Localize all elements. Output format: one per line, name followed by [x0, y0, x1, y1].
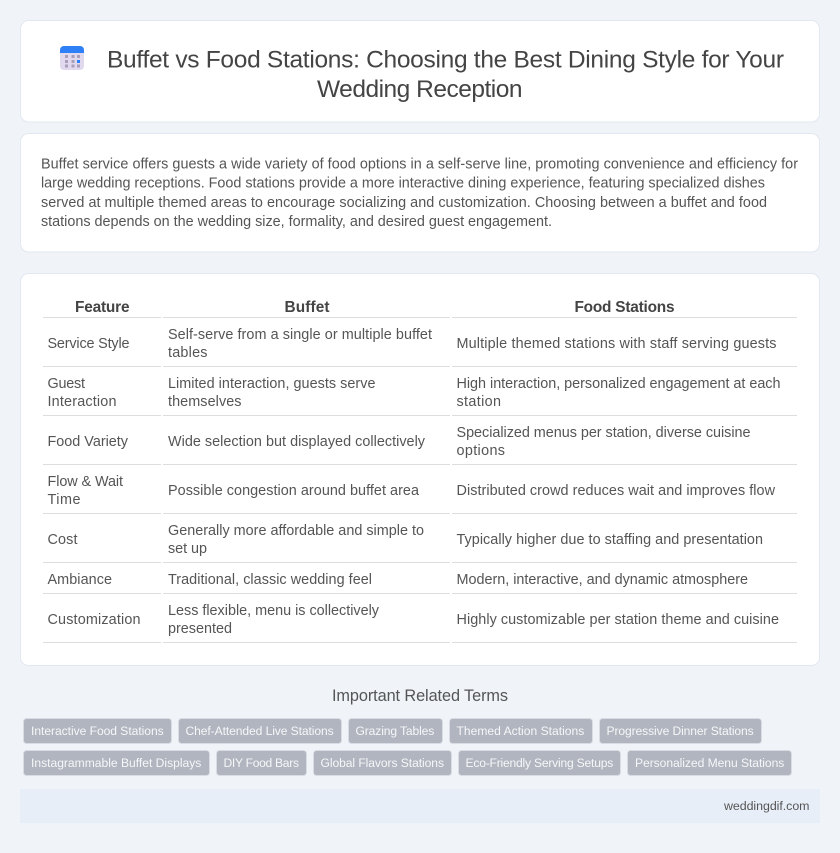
- header panel: [20, 20, 820, 122]
- tag: Instagrammable Buffet Displays: [31, 756, 201, 770]
- row: flow and wait time: [43, 474, 797, 514]
- tag: [314, 750, 452, 776]
- row: guest interaction: Limited interaction, guests serve: [168, 376, 376, 392]
- related terms heading: Important Related Terms: [332, 687, 508, 705]
- tag: [450, 718, 592, 744]
- row: service style: Multiple themed stations with staff serving guests: [456, 336, 776, 352]
- footer bar: [20, 789, 820, 823]
- panel: intro text: [20, 134, 820, 252]
- tag: [628, 750, 792, 776]
- intro paragraph: [41, 156, 798, 230]
- tag: [216, 750, 306, 776]
- row: cost: Generally more affordable and simple to: [168, 523, 424, 539]
- row: customization: Highly customizable per station theme and cuisine: [456, 612, 779, 628]
- row: guest interaction: station: [456, 394, 501, 410]
- row: flow and wait time: Flow & Wait: [48, 474, 123, 490]
- row: guest interaction: High interaction, personalized engagement at each: [456, 376, 780, 392]
- panel: comparison table: [20, 274, 820, 666]
- tag: Eco-Friendly Serving Setups: [466, 756, 613, 770]
- row: cost: set up: [168, 541, 207, 557]
- row: food variety: options: [456, 443, 505, 459]
- row: guest interaction: themselves: [168, 394, 242, 410]
- tag: Global Flavors Stations: [320, 756, 444, 770]
- title: Buffet vs Food Stations: Choosing the Best Dining Style for Your: [107, 46, 784, 74]
- row: flow and wait time: Possible congestion around buffet area: [168, 483, 419, 499]
- row: flow and wait time: Time: [48, 492, 80, 508]
- row: service style: Service Style: [48, 336, 130, 352]
- row: service style: Self-serve from a single or multiple buffet: [168, 327, 432, 343]
- table header row: Food Stations: [574, 299, 674, 316]
- row: guest interaction: Interaction: [48, 394, 116, 410]
- icon: calendar: [60, 46, 84, 70]
- row: customization: Less flexible, menu is collectively: [168, 603, 380, 619]
- tag: Chef-Attended Live Stations: [186, 724, 334, 738]
- related terms tags: [24, 718, 792, 776]
- row: food variety: Wide selection but displayed collectively: [168, 434, 426, 450]
- intro paragraph: large wedding receptions. Food stations provide a more interactive dining experience, featuring specialized dishes: [41, 176, 765, 192]
- row: ambiance: Traditional, classic wedding feel: [168, 572, 372, 588]
- row: customization: presented: [168, 621, 232, 637]
- row: cost: Typically higher due to staffing and presentation: [456, 532, 763, 548]
- row: food variety: [43, 425, 797, 465]
- table header row: Buffet: [284, 299, 330, 316]
- row: guest interaction: [43, 376, 797, 416]
- row: ambiance: [43, 572, 797, 594]
- row: cost: Cost: [48, 532, 78, 548]
- tag: [24, 718, 172, 744]
- row: food variety: Specialized menus per station, diverse cuisine: [456, 425, 750, 441]
- table header row: Feature: [75, 299, 130, 316]
- tag: [458, 750, 620, 776]
- row: ambiance: Ambiance: [48, 572, 112, 588]
- row: customization: Customization: [48, 612, 140, 628]
- tag: [178, 718, 342, 744]
- intro paragraph: served at multiple themed areas to encourage socializing and customization. Choosing between a buffet and food: [41, 195, 767, 211]
- tag: Personalized Menu Stations: [635, 756, 784, 770]
- title: [107, 46, 784, 103]
- row: cost: [43, 523, 797, 563]
- tag: [348, 718, 442, 744]
- row: ambiance: Modern, interactive, and dynamic atmosphere: [456, 572, 748, 588]
- tag: Grazing Tables: [356, 724, 434, 738]
- footer source text: weddingdif.com: [723, 799, 810, 813]
- row: customization: [43, 603, 797, 643]
- row: service style: [43, 327, 797, 367]
- tag: Themed Action Stations: [456, 724, 584, 738]
- tag: [600, 718, 762, 744]
- row: food variety: Food Variety: [48, 434, 129, 450]
- row: service style: tables: [168, 345, 208, 361]
- tag: [24, 750, 210, 776]
- row: flow and wait time: Distributed crowd reduces wait and improves flow: [456, 483, 776, 499]
- table header row: [43, 299, 797, 318]
- title: Wedding Reception: [317, 76, 522, 103]
- tag: Progressive Dinner Stations: [606, 724, 754, 738]
- tag: DIY Food Bars: [224, 756, 299, 770]
- intro paragraph: stations depends on the wedding size, formality, and desired guest engagement.: [41, 214, 552, 230]
- intro paragraph: Buffet service offers guests a wide variety of food options in a self-serve line, promoting convenience and efficiency for: [41, 156, 798, 172]
- row: guest interaction: Guest: [48, 376, 85, 392]
- tag: Interactive Food Stations: [31, 724, 164, 738]
